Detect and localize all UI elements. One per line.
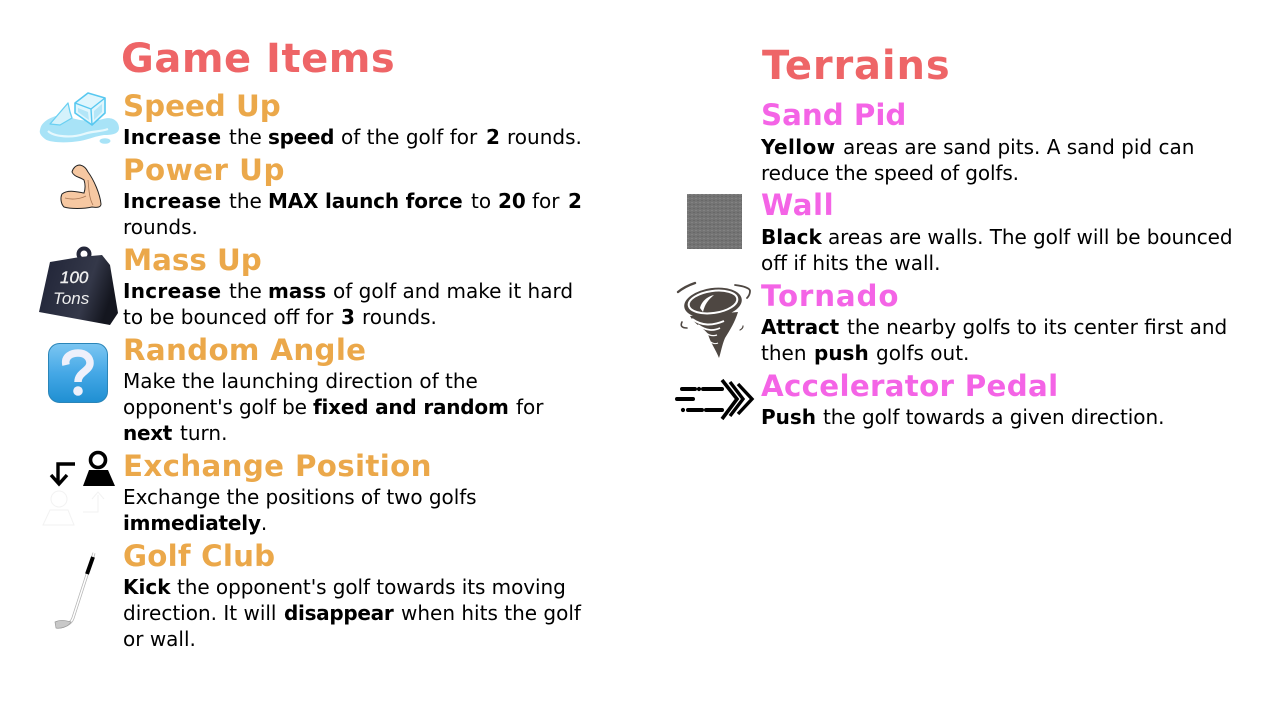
item: Exchange Position: Exchange the positions of two golfs xyxy=(123,485,477,509)
heading: Terrains: Terrains xyxy=(762,43,951,89)
item: Power Up: for xyxy=(532,189,560,213)
item: Tornado: Attract xyxy=(761,315,839,339)
item: Power Up: Power Up xyxy=(123,153,285,187)
icon: accelerator arrows xyxy=(675,378,754,420)
item: Golf Club: or wall. xyxy=(123,627,196,651)
heading: Game Items: Game Items xyxy=(121,36,395,82)
item: Sand Pid xyxy=(760,98,1194,185)
item: Power Up: Increase xyxy=(123,189,221,213)
item: Sand Pid: Yellow xyxy=(761,135,836,159)
item: Mass Up: Mass Up xyxy=(123,243,262,277)
item: Speed Up: of the golf for xyxy=(341,125,477,149)
item: Tornado: golfs out. xyxy=(876,341,969,365)
item: Power Up: MAX launch force xyxy=(268,189,462,213)
icon: tornado xyxy=(676,282,751,358)
item: Golf Club: Kick xyxy=(123,575,171,599)
item: Mass Up: 3 xyxy=(341,305,355,329)
item: Golf Club: Golf Club xyxy=(123,539,275,573)
item: Mass Up: the xyxy=(229,279,262,303)
item: Sand Pid: Sand Pid xyxy=(761,98,906,132)
item: Speed Up: Speed Up xyxy=(123,89,281,123)
item: Mass Up xyxy=(123,243,573,329)
item: Power Up: to xyxy=(471,189,491,213)
item: Tornado xyxy=(761,279,1227,365)
item: Speed Up: 2 xyxy=(486,125,500,149)
item: Golf Club: disappear xyxy=(284,601,393,625)
item: Random Angle: next xyxy=(123,421,172,445)
item: Mass Up: mass xyxy=(268,279,326,303)
item: Power Up: 2 xyxy=(568,189,582,213)
icon: 100 tons weight xyxy=(39,246,118,325)
item: Wall: Wall xyxy=(761,188,834,222)
item: Exchange Position xyxy=(123,449,477,535)
item: Tornado: push xyxy=(814,341,869,365)
item: Speed Up: the xyxy=(229,125,262,149)
item: Speed Up: speed xyxy=(268,125,334,149)
icon: wall texture xyxy=(687,194,742,249)
item: Wall xyxy=(761,188,1233,275)
item: Power Up: the xyxy=(229,189,262,213)
item: Tornado: then xyxy=(761,341,806,365)
item: Wall: off if hits the wall. xyxy=(761,251,940,275)
item: Power Up: rounds. xyxy=(123,215,198,239)
item: Mass Up: Increase xyxy=(123,279,221,303)
item: Tornado: Tornado xyxy=(761,279,899,313)
item: Wall: areas are walls. The golf will be bounced xyxy=(828,225,1233,249)
item: Mass Up: of golf and make it hard xyxy=(333,279,573,303)
item: Wall: Black xyxy=(761,225,822,249)
icon: golf club xyxy=(54,552,96,629)
item: Random Angle xyxy=(123,333,544,445)
item: Accelerator Pedal: Push xyxy=(761,405,816,429)
item: Sand Pid: reduce the speed of golfs. xyxy=(761,161,1019,185)
icon: 100 tons weight: 100 xyxy=(60,268,89,287)
item: Random Angle: Make the launching direction of the xyxy=(123,369,478,393)
icon: flexed arm xyxy=(60,164,102,209)
item: Speed Up xyxy=(123,89,582,149)
icon: melting ice cube xyxy=(40,92,119,144)
item: Golf Club: the opponent's golf towards its moving xyxy=(177,575,566,599)
item: Exchange Position: immediately. xyxy=(123,511,267,535)
item: Tornado: the nearby golfs to its center first and xyxy=(847,315,1227,339)
icon: 100 tons weight: Tons xyxy=(53,289,90,308)
item: Sand Pid: areas are sand pits. A sand pid can xyxy=(843,135,1194,159)
item: Random Angle: Random Angle xyxy=(123,333,366,367)
item: Accelerator Pedal: Accelerator Pedal xyxy=(761,369,1058,403)
item: Power Up: 20 xyxy=(498,189,526,213)
item: Exchange Position: Exchange Position xyxy=(123,449,432,483)
icon: question mark button xyxy=(48,343,108,403)
item: Speed Up: rounds. xyxy=(507,125,582,149)
item: Mass Up: to be bounced off for xyxy=(123,305,333,329)
item: Speed Up: Increase xyxy=(123,125,221,149)
item: Golf Club: direction. It will xyxy=(123,601,276,625)
item: Power Up xyxy=(123,153,582,239)
item: Random Angle: for xyxy=(516,395,544,419)
item: Accelerator Pedal: the golf towards a given direction. xyxy=(823,405,1164,429)
item: Golf Club: when hits the golf xyxy=(401,601,581,625)
icon: exchange position xyxy=(42,450,115,526)
item: Random Angle: fixed and random xyxy=(313,395,509,419)
item: Accelerator Pedal xyxy=(761,369,1164,429)
item: Golf Club xyxy=(123,539,582,651)
item: Random Angle: opponent's golf be xyxy=(123,395,307,419)
item: Random Angle: turn. xyxy=(180,421,227,445)
item: Mass Up: rounds. xyxy=(362,305,437,329)
